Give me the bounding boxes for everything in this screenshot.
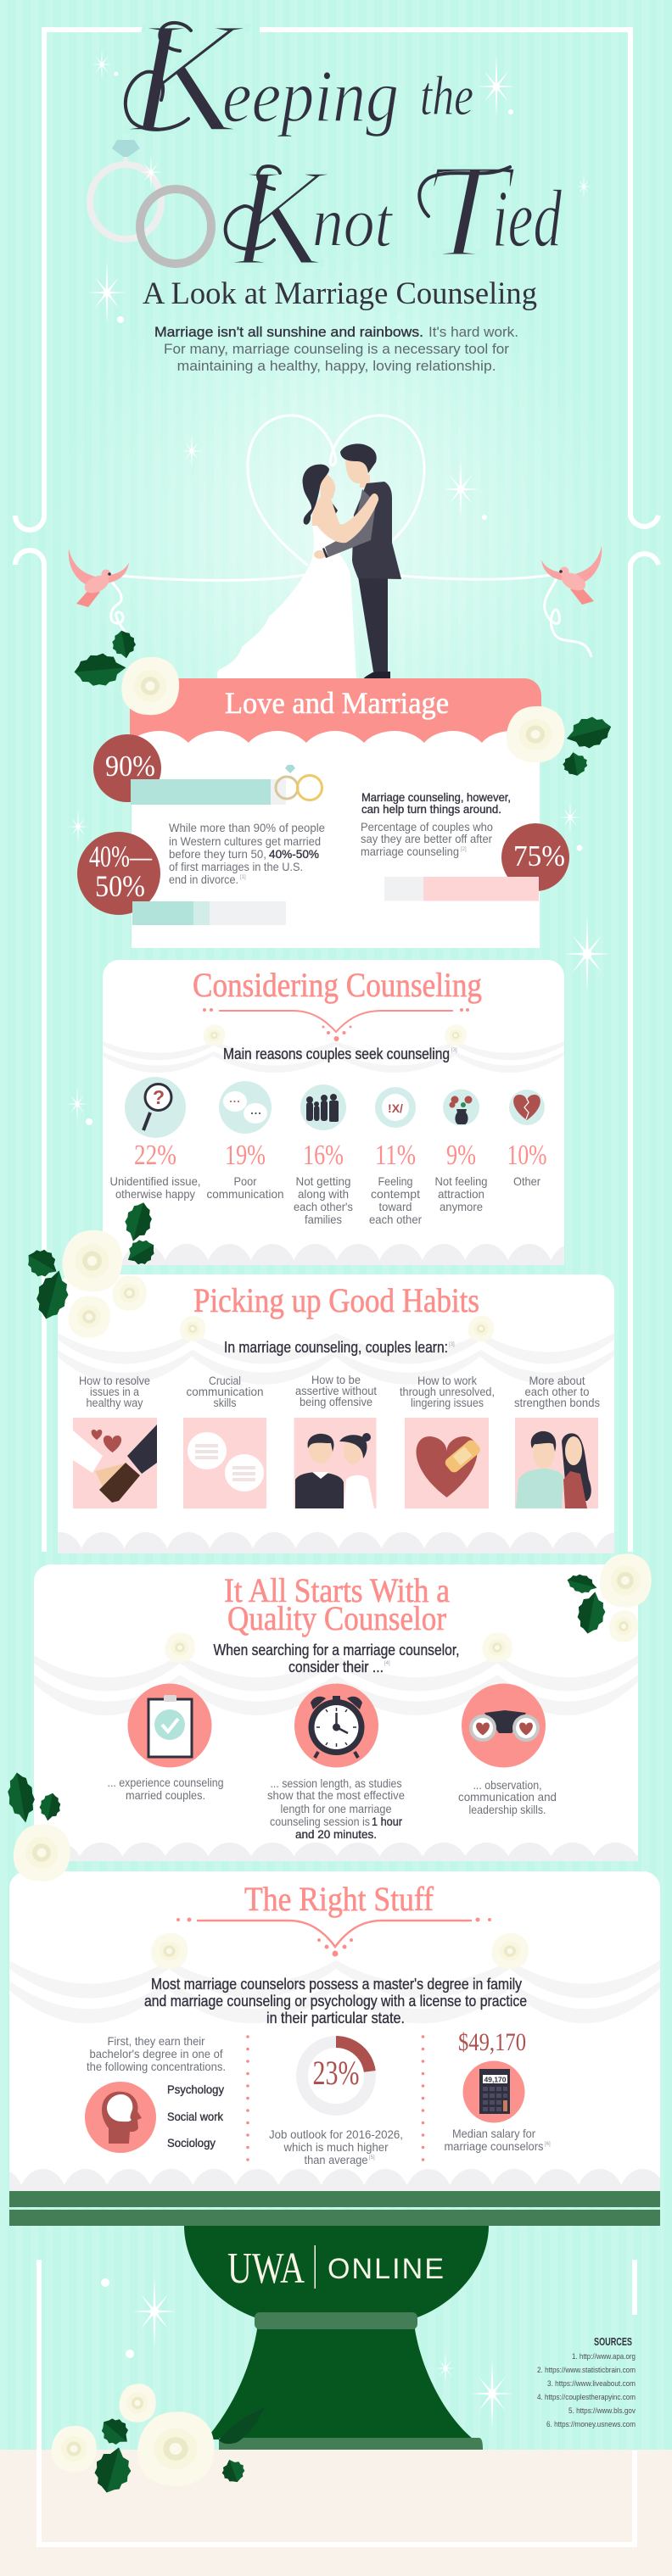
drapes: [103, 1041, 564, 1073]
reason: 16%: along with: [298, 1187, 349, 1201]
card: resolve issues: [73, 1374, 157, 1508]
reason: 16%: families: [305, 1213, 342, 1226]
flowers: bottom bouquet: [52, 2384, 264, 2497]
reason: 9%: anymore: [440, 1200, 483, 1213]
title flourishes: [126, 23, 510, 249]
subheading: Main reasons couples seek counseling: [223, 1045, 450, 1062]
small flowers: [204, 1024, 467, 1046]
intro text: Most marriage counselors possess a master's degree in family: [151, 1976, 522, 1993]
stat: 75%: 75%: [513, 839, 565, 873]
card: unresolved issues: [400, 1374, 495, 1508]
intro text: It's hard work.: [428, 324, 518, 340]
card: strengthen bonds: each other to: [524, 1385, 590, 1398]
subheading: consider their ...: [288, 1659, 384, 1676]
stat: 75%: [384, 823, 569, 900]
card: strengthen bonds: More about: [529, 1374, 585, 1387]
title: not: [312, 183, 394, 262]
sources: 4. https://couplestherapyinc.com: [537, 2393, 636, 2402]
title: T: [421, 135, 517, 286]
column: median salary: $49,170: [458, 2028, 526, 2056]
sources: 1. http://www.apa.org: [572, 2352, 636, 2361]
subheading: In marriage counseling, couples learn:: [224, 1339, 448, 1356]
panel: picking up good habits: [3]: [449, 1342, 455, 1347]
sources: 5. https://www.bls.gov: [568, 2406, 636, 2416]
column: job outlook: [5]: [369, 2155, 375, 2161]
panel: the right stuff: [9, 1871, 660, 2191]
text: counseling helps: [361, 790, 511, 858]
subheading: [214, 1642, 460, 1676]
icon: wedding rings: [90, 140, 211, 264]
flowers: considering and habits: [22, 1199, 160, 1338]
stat text: divorce: 40%-50%: [269, 847, 319, 861]
column: median salary: marriage counselors: [445, 2139, 543, 2153]
stat: 90%: [93, 734, 322, 805]
intro text: [144, 1976, 527, 2027]
title: K: [229, 139, 332, 295]
intro text: and marriage counseling or psychology with a license to practice: [144, 1993, 527, 2010]
title: eeping: [222, 56, 399, 138]
scallop band: [9, 2169, 660, 2191]
icon: right dove: [541, 546, 602, 605]
dotted dividers: [246, 2035, 424, 2161]
reason: 10%: 10%: [507, 1140, 546, 1171]
sparkles: [66, 47, 610, 2428]
item: session length: length for one marriage: [280, 1802, 392, 1815]
column: median salary: [445, 2028, 551, 2153]
intro text: maintaining a healthy, happy, loving relationship.: [177, 358, 496, 374]
stat text: divorce: While more than 90% of people: [169, 821, 325, 834]
item: session length: 1 hour: [372, 1815, 402, 1828]
column: concentrations: Sociology: [167, 2136, 216, 2149]
reason: 16%: Not getting: [295, 1174, 351, 1188]
stat text: divorce: in Western cultures get married: [169, 834, 321, 848]
column: median salary: Median salary for: [452, 2127, 535, 2140]
ornament: [203, 1008, 469, 1041]
column: concentrations: bachelor's degree in one of: [90, 2047, 223, 2060]
reason: 9%: [434, 1089, 487, 1213]
heading: Picking up Good Habits: [193, 1281, 479, 1319]
card: strengthen bonds: strengthen bonds: [514, 1396, 600, 1409]
intro text: For many, marriage counseling is a necessary tool for: [164, 341, 509, 357]
panel: considering counseling: [103, 960, 564, 1265]
heading: [224, 1571, 450, 1637]
reason: 22%: Unidentified issue,: [110, 1174, 200, 1188]
logo: UWA: [227, 2244, 305, 2293]
card: resolve issues: How to resolve: [79, 1374, 150, 1387]
ornament: [176, 1918, 491, 1957]
sources: SOURCES: [594, 2336, 632, 2348]
card: assertive: being offensive: [300, 1395, 372, 1408]
stat: 40%-50%: 40%—: [89, 839, 153, 873]
title: ied: [492, 173, 563, 264]
sources: [537, 2336, 636, 2429]
intro text: Marriage isn't all sunshine and rainbows.: [154, 324, 423, 340]
sources: 2. https://www.statisticbrain.com: [537, 2366, 636, 2375]
reason: 11%: toward: [378, 1200, 412, 1213]
card: strengthen bonds: [514, 1374, 600, 1508]
card: unresolved issues: through unresolved,: [400, 1385, 495, 1398]
text: counseling helps: Marriage counseling, however,: [361, 790, 511, 804]
card: communication skills: communication: [187, 1385, 263, 1398]
reason: 11%: !X/: [388, 1101, 403, 1115]
subheading: [4]: [384, 1661, 390, 1666]
item: session length: and 20 minutes.: [295, 1827, 377, 1841]
card: unresolved issues: How to work: [417, 1374, 478, 1387]
drapes: [34, 1655, 638, 1715]
item: observation: leadership skills.: [468, 1803, 546, 1816]
item: session length: [267, 1684, 405, 1841]
item: observation: communication and: [458, 1790, 557, 1804]
reason: 11%: contempt: [371, 1187, 420, 1201]
small flowers: [165, 1632, 512, 1663]
stat: 40%-50%: [77, 832, 286, 925]
title: [125, 0, 563, 295]
reason: 11%: each other: [369, 1213, 422, 1226]
item: observation: ... observation,: [473, 1778, 541, 1792]
logo: [227, 2244, 444, 2293]
icon: left dove: [69, 549, 129, 607]
reason: 22%: [110, 1077, 200, 1201]
text: counseling helps: say they are better off after: [361, 832, 492, 845]
stat text: divorce: [1]: [240, 875, 246, 880]
flowers: love and marriage: [73, 628, 615, 778]
column: concentrations: the following concentrations.: [87, 2060, 226, 2073]
text: counseling helps: marriage counseling: [361, 845, 459, 858]
panel: considering counseling: [3]: [451, 1048, 457, 1053]
reason: 16%: [294, 1084, 353, 1226]
column: job outlook: Job outlook for 2016-2026,: [269, 2127, 403, 2141]
reason: 19%: [207, 1081, 283, 1201]
column: concentrations: [85, 2034, 226, 2153]
item: experience: [107, 1684, 224, 1802]
reason: 22%: 22%: [134, 1140, 176, 1171]
reason: 11%: 11%: [375, 1140, 416, 1171]
reason: 9%: 9%: [446, 1140, 476, 1171]
drapes: [58, 1333, 614, 1385]
panel body: [132, 729, 540, 948]
card: assertive: [294, 1373, 377, 1508]
item: session length: show that the most effective: [267, 1788, 405, 1802]
card: unresolved issues: lingering issues: [411, 1396, 484, 1409]
item: experience: married couples.: [126, 1788, 205, 1802]
reason: 9%: attraction: [438, 1187, 484, 1201]
scallop band: [34, 1843, 638, 1861]
column: median salary: [6]: [545, 2142, 551, 2147]
reason: 22%: otherwise happy: [115, 1187, 195, 1201]
scallop band: [58, 1532, 614, 1553]
card: assertive: How to be: [311, 1373, 361, 1386]
flowers: left of right stuff: [4, 1770, 70, 1882]
heading: Love and Marriage: [225, 686, 449, 720]
subtitle: A Look at Marriage Counseling: [143, 276, 537, 311]
panel: love and marriage: [77, 678, 569, 948]
card: communication skills: skills: [214, 1396, 236, 1409]
intro text: in their particular state.: [266, 2010, 405, 2027]
item: experience: ... experience counseling: [107, 1776, 224, 1789]
reason: 22%: ?: [153, 1086, 165, 1108]
cake stand pedestal: [9, 2191, 660, 2450]
sources: 6. https://money.usnews.com: [546, 2420, 636, 2429]
drapes: [9, 1960, 660, 2023]
stat: 40%-50%: 50%: [95, 869, 145, 903]
card: resolve issues: issues in a: [90, 1385, 139, 1398]
reason: 19%: Poor: [234, 1174, 257, 1188]
column: job outlook: than average: [304, 2153, 368, 2166]
card: assertive: assertive without: [295, 1384, 377, 1397]
stat text: divorce: before they turn 50,: [169, 847, 266, 861]
heading: The Right Stuff: [244, 1880, 434, 1918]
text: counseling helps: [2]: [461, 847, 467, 852]
column: concentrations: Psychology: [167, 2083, 224, 2096]
card: communication skills: Crucial: [209, 1374, 241, 1387]
column: job outlook: [269, 2036, 403, 2166]
title: the: [420, 65, 473, 127]
column: concentrations: First, they earn their: [107, 2034, 205, 2048]
item: observation: [458, 1684, 557, 1816]
reason: 10%: Other: [513, 1174, 540, 1188]
reason: 11%: Feeling: [378, 1174, 412, 1188]
reason: 16%: each other's: [294, 1200, 353, 1213]
stat text: divorce: of first marriages in the U.S.: [169, 860, 303, 873]
card: communication skills: [183, 1374, 266, 1508]
intro text: [154, 324, 518, 374]
stat text: divorce: [169, 821, 325, 886]
column: job outlook: 23%: [312, 2054, 360, 2092]
sources: 3. https://www.liveabout.com: [547, 2379, 636, 2389]
panel: quality counselor: [34, 1564, 638, 1861]
text: counseling helps: can help turn things around.: [361, 802, 501, 816]
heading: Quality Counselor: [227, 1599, 446, 1637]
item: session length: counseling session is: [270, 1815, 370, 1828]
reason: 19%: 19%: [225, 1140, 266, 1171]
heading: Considering Counseling: [193, 966, 482, 1004]
logo: ONLINE: [328, 2253, 444, 2285]
reason: 9%: Not feeling: [434, 1174, 487, 1188]
illustration: bride and groom: [217, 443, 401, 683]
subheading: When searching for a marriage counselor,: [214, 1642, 460, 1659]
column: median salary: 49,170: [484, 2076, 507, 2084]
reason: 11%: [369, 1087, 422, 1226]
panel: picking up good habits: [58, 1274, 614, 1553]
small flowers: [180, 1316, 494, 1341]
heading: It All Starts With a: [224, 1571, 450, 1609]
illustration: heart rope and doves: [69, 415, 602, 657]
stat: 90%: 90%: [105, 750, 155, 783]
reason: 10%: [507, 1090, 546, 1188]
text: counseling helps: Percentage of couples who: [361, 820, 493, 834]
column: job outlook: which is much higher: [283, 2140, 389, 2154]
panel header: [130, 678, 541, 743]
card: resolve issues: healthy way: [87, 1396, 143, 1409]
stat text: divorce: end in divorce.: [169, 873, 238, 886]
reason: 19%: communication: [207, 1187, 283, 1201]
flowers: quality counselor: [565, 1553, 652, 1642]
reason: 16%: 16%: [303, 1140, 344, 1171]
scallop band: [103, 1244, 564, 1265]
item: session length: ... session length, as studies: [270, 1776, 402, 1790]
small flowers: [151, 1933, 529, 1969]
column: concentrations: Social work: [167, 2110, 224, 2123]
